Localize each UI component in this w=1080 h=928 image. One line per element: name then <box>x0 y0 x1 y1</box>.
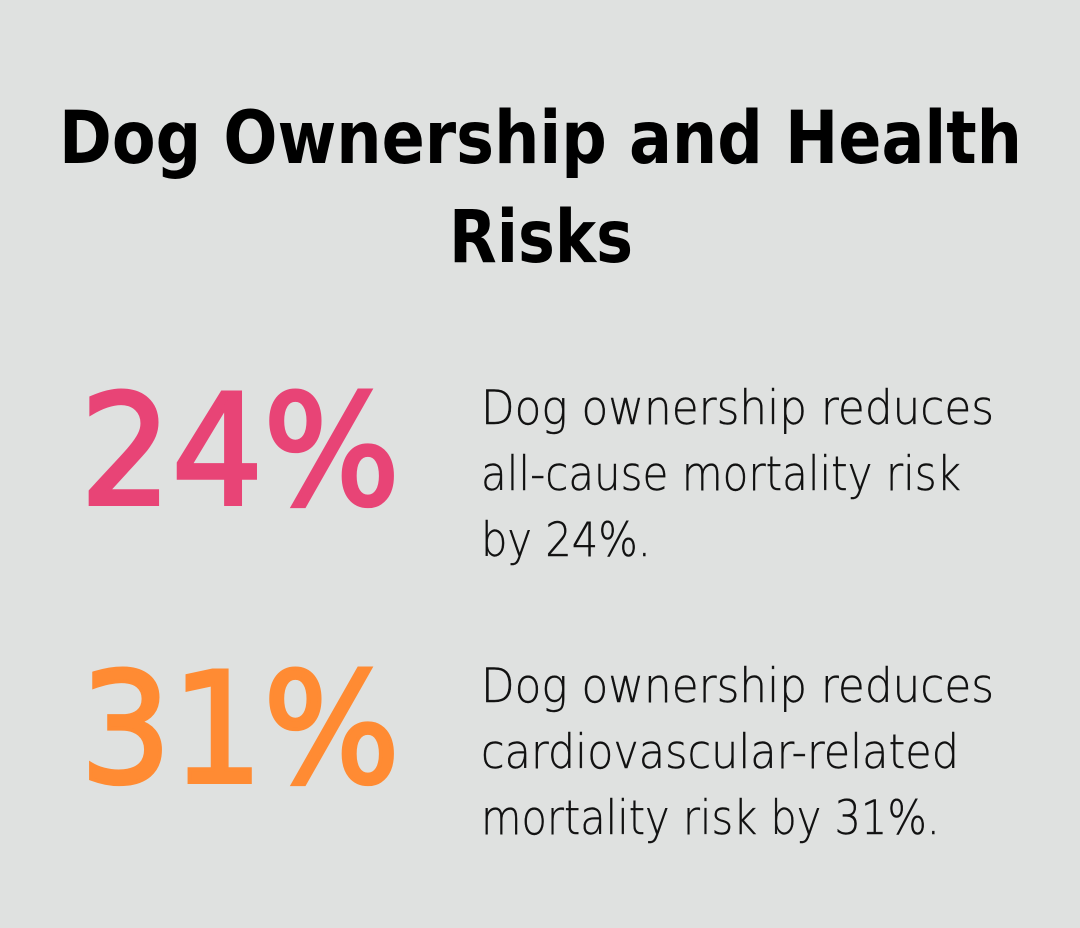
description: cardiovascular mortality: mortality risk by 31%. <box>481 791 940 846</box>
description: all-cause mortality: all-cause mortality risk <box>481 447 961 502</box>
description: cardiovascular mortality: Dog ownership reduces <box>481 659 994 714</box>
description: cardiovascular mortality <box>481 659 994 846</box>
description: all-cause mortality <box>481 381 994 568</box>
description: cardiovascular mortality: cardiovascular-related <box>481 725 959 780</box>
stat row: cardiovascular mortality <box>80 641 994 846</box>
stat: 31%: 31% <box>80 641 400 819</box>
title: Risks <box>449 195 633 280</box>
stat: 24%: 24% <box>80 363 400 541</box>
title <box>59 96 1022 280</box>
stat row: all-cause mortality <box>80 363 994 568</box>
description: all-cause mortality: by 24%. <box>481 513 651 568</box>
description: all-cause mortality: Dog ownership reduces <box>481 381 994 436</box>
